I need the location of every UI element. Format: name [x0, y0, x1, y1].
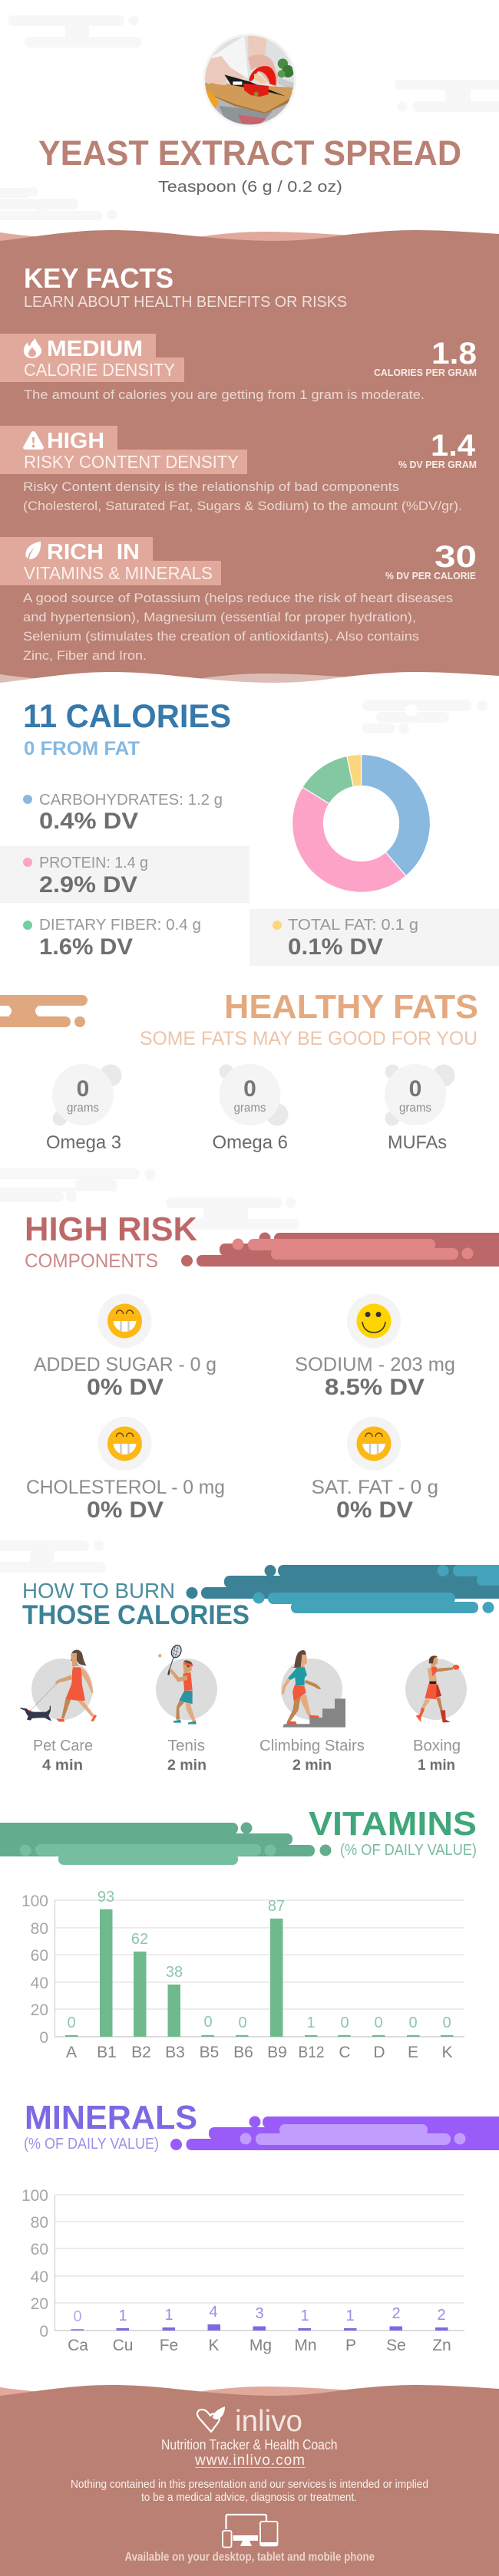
disclaimer: to be a medical advice, diagnosis or treatment.: [141, 2491, 357, 2504]
bar chart: minerals: 2: [392, 2305, 401, 2322]
icon: warning triangle: [23, 431, 44, 450]
item: cholesterol: [26, 1417, 225, 1523]
serving size: Teaspoon (6 g / 0.2 oz): [158, 179, 342, 196]
bar chart: minerals: Cu: [113, 2337, 133, 2354]
fact: rich in vitamins and minerals: VITAMINS & MINERALS: [24, 563, 213, 583]
logo: inlivo: [197, 2405, 302, 2438]
subheading: LEARN ABOUT HEALTH BENEFITS OR RISKS: [24, 294, 347, 311]
item: omega 6: Omega 6: [212, 1132, 288, 1153]
activity: climbing stairs: [259, 1650, 365, 1774]
fact: calorie density: CALORIE DENSITY: [24, 360, 175, 380]
bar chart: vitamins: 0: [238, 2014, 247, 2031]
heading: high risk: HIGH RISK: [25, 1211, 197, 1248]
icon: grinning face: [107, 1427, 142, 1461]
item: saturated fat: 0% DV: [336, 1497, 413, 1523]
activity: climbing stairs: 2 min: [292, 1757, 332, 1774]
item: mufas: grams: [399, 1102, 431, 1115]
heading: healthy fats: HEALTHY FATS: [224, 988, 478, 1026]
bar chart: vitamins: 20: [31, 2001, 48, 2019]
item: omega 3: Omega 3: [46, 1132, 121, 1153]
bar chart: minerals: 60: [31, 2241, 48, 2258]
fact: rich in vitamins and minerals: Zinc, Fiber and Iron.: [23, 648, 147, 663]
icon: grinning face: [356, 1427, 392, 1461]
legend: dietary fiber: 1.6% DV: [39, 934, 133, 960]
activity: pet care: Pet Care: [33, 1738, 93, 1754]
item: cholesterol: 0% DV: [87, 1497, 164, 1523]
item: omega 3: 0: [77, 1076, 89, 1102]
panel: healthy fats: [0, 988, 478, 1153]
legend: total fat: [250, 909, 499, 966]
header photo: cutting vegetables: [201, 34, 298, 131]
item: cholesterol: CHOLESTEROL - 0 mg: [26, 1477, 225, 1498]
bar chart: minerals: 20: [31, 2295, 48, 2313]
item: omega 3: [46, 1064, 121, 1153]
tagline: Nutrition Tracker & Health Coach: [161, 2437, 338, 2452]
bar chart: vitamins: 62: [131, 1931, 148, 1948]
icon: grinning face: [107, 1304, 142, 1338]
item: omega 3: grams: [67, 1102, 99, 1115]
bar chart: minerals: 0: [73, 2308, 82, 2325]
item: sodium: [295, 1294, 455, 1400]
legend: total fat: TOTAL FAT: 0.1 g: [288, 917, 418, 934]
panel: key facts: [0, 230, 499, 692]
decorative banner: orange: [0, 995, 88, 1027]
item: saturated fat: SAT. FAT - 0 g: [312, 1477, 438, 1498]
bar chart: vitamins: 0: [340, 2014, 349, 2031]
icon: flame: [24, 338, 41, 358]
bar chart: vitamins: B3: [165, 2044, 185, 2061]
bar chart: vitamins: 0: [67, 2014, 76, 2031]
item: sodium: 8.5% DV: [325, 1375, 425, 1400]
icon: boxer: [416, 1655, 459, 1722]
fact: risky content density: % DV PER GRAM: [398, 459, 477, 470]
donut chart: [292, 755, 430, 892]
icon: devices: [223, 2515, 278, 2547]
activity: tennis: 2 min: [167, 1757, 207, 1774]
bar chart: vitamins: B6: [233, 2044, 253, 2061]
heading: those calories: THOSE CALORIES: [22, 1600, 250, 1630]
activity: climbing stairs: Climbing Stairs: [259, 1738, 365, 1754]
bar chart: vitamins: 93: [97, 1889, 114, 1906]
heading: minerals: MINERALS: [25, 2099, 197, 2136]
activity: pet care: [20, 1650, 97, 1774]
bar chart: vitamins: 0: [408, 2014, 418, 2031]
decorative banner: green: [0, 1823, 332, 1865]
bar chart: minerals: 3: [255, 2305, 264, 2322]
bar chart: vitamins: 0: [39, 2029, 48, 2047]
bar chart: vitamins: 1: [306, 2014, 316, 2031]
fact: rich in vitamins and minerals: % DV PER CALORIE: [385, 570, 476, 581]
bar chart: vitamins: C: [339, 2044, 351, 2061]
bar chart: vitamins: 38: [166, 1964, 183, 1981]
activity: boxing: Boxing: [413, 1738, 461, 1754]
bar chart: minerals: 2: [437, 2307, 446, 2324]
bar chart: vitamins: 100: [21, 1892, 48, 1910]
activity: boxing: [405, 1655, 467, 1774]
title: YEAST EXTRACT SPREAD: [38, 133, 461, 173]
fact: calorie density: MEDIUM: [47, 337, 143, 361]
icon: woman walking a dog: [20, 1650, 97, 1721]
legend: dietary fiber: [23, 917, 201, 960]
bar chart: minerals: [21, 2187, 464, 2354]
panel: footer: [0, 2385, 499, 2576]
disclaimer: Nothing contained in this presentation and our services is intended or implied: [71, 2478, 428, 2491]
heading: key facts: KEY FACTS: [24, 262, 173, 294]
bar chart: minerals: Se: [386, 2337, 406, 2354]
bar chart: vitamins: 0: [374, 2014, 383, 2031]
fact: calorie density: CALORIES PER GRAM: [374, 367, 477, 378]
item: omega 6: 0: [243, 1076, 256, 1102]
activity: boxing: 1 min: [418, 1757, 455, 1774]
bar chart: vitamins: D: [373, 2044, 385, 2061]
item: saturated fat: [312, 1417, 438, 1523]
fact: rich in vitamins and minerals: and hypertension), Magnesium (essential for proper hydration),: [23, 610, 416, 624]
subheading: (% OF DAILY VALUE): [24, 2136, 159, 2153]
bar chart: minerals: 4: [209, 2304, 218, 2321]
legend: carbohydrates: 0.4% DV: [39, 809, 138, 834]
bar chart: minerals: P: [345, 2337, 356, 2354]
bar chart: minerals: 0: [39, 2323, 48, 2340]
bar chart: vitamins: 0: [442, 2014, 451, 2031]
panel: calories: [0, 698, 499, 966]
fact: rich in vitamins and minerals: A good source of Potassium (helps reduce the risk of heart diseases: [23, 591, 453, 605]
bar chart: vitamins: [21, 1889, 464, 2061]
bar chart: minerals: 1: [118, 2308, 127, 2324]
item: mufas: MUFAs: [388, 1132, 447, 1153]
fact: rich in vitamins and minerals: [0, 537, 477, 663]
bar chart: minerals: 1: [300, 2308, 309, 2324]
fact: calorie density: [0, 334, 477, 402]
icon: tennis player: [158, 1644, 197, 1724]
subheading: (% OF DAILY VALUE): [340, 1842, 477, 1859]
bar chart: vitamins: B12: [298, 2044, 324, 2061]
availability note: Available on your desktop, tablet and mobile phone: [124, 2551, 375, 2564]
legend: protein: 2.9% DV: [39, 872, 137, 898]
item: mufas: 0: [409, 1076, 421, 1102]
item: mufas: [385, 1064, 454, 1153]
icon: leaf: [25, 542, 41, 559]
bar chart: vitamins: B5: [200, 2044, 219, 2061]
panel: high risk components: [25, 1211, 499, 1523]
bar chart: minerals: 80: [31, 2214, 48, 2232]
item: added sugar: 0% DV: [87, 1375, 164, 1400]
bar chart: vitamins: B2: [131, 2044, 151, 2061]
bar chart: minerals: K: [208, 2337, 220, 2354]
legend: protein: [0, 846, 250, 903]
activity: pet care: 4 min: [42, 1757, 83, 1774]
item: omega 6: [212, 1064, 289, 1153]
panel: how to burn those calories: [20, 1565, 499, 1774]
decorative banner: red: [181, 1232, 499, 1267]
logo: inlivo: inlivo: [235, 2405, 302, 2438]
subheading: components: COMPONENTS: [25, 1250, 158, 1272]
website link: www.inlivo.com: [194, 2452, 305, 2469]
heading: vitamins: VITAMINS: [309, 1805, 477, 1843]
item: omega 6: grams: [233, 1102, 266, 1115]
bar chart: vitamins: 87: [268, 1898, 285, 1915]
bar chart: minerals: Mg: [250, 2337, 272, 2354]
fact: rich in vitamins and minerals: 30: [435, 540, 477, 574]
decorative banner: teal: [186, 1565, 499, 1613]
fact: rich in vitamins and minerals: Selenium (stimulates the creation of antioxidants). Also contains: [23, 629, 419, 644]
bar chart: vitamins: E: [408, 2044, 418, 2061]
bar chart: minerals: Fe: [160, 2337, 178, 2354]
fact: risky content density: 1.4: [431, 429, 476, 463]
bar chart: vitamins: B1: [97, 2044, 117, 2061]
fact: calorie density: The amount of calories you are getting from 1 gram is moderate.: [24, 387, 425, 402]
fact: calorie density: 1.8: [431, 337, 477, 371]
fact: risky content density: Risky Content density is the relationship of bad components: [23, 479, 399, 494]
activity: tennis: Tenis: [167, 1738, 205, 1754]
activity: tennis: [156, 1644, 217, 1774]
bar chart: vitamins: K: [441, 2044, 453, 2061]
bar chart: minerals: 40: [31, 2268, 48, 2286]
panel: vitamins: [0, 1805, 477, 2061]
icon: smiling face: [356, 1304, 392, 1338]
panel: minerals: [21, 2099, 499, 2354]
icon: woman climbing stairs: [282, 1650, 345, 1728]
legend: protein: PROTEIN: 1.4 g: [39, 855, 148, 871]
bar chart: vitamins: A: [66, 2044, 77, 2061]
bar chart: vitamins: 0: [203, 2014, 213, 2031]
bar chart: vitamins: 60: [31, 1947, 48, 1965]
fact: risky content density: HIGH: [47, 429, 104, 453]
disclaimer: [71, 2478, 428, 2504]
bar chart: minerals: 100: [21, 2187, 48, 2205]
legend: carbohydrates: CARBOHYDRATES: 1.2 g: [39, 792, 223, 809]
heading: how to burn: HOW TO BURN: [22, 1579, 175, 1603]
legend: total fat: 0.1% DV: [288, 934, 383, 960]
heading: calories: 11 CALORIES: [23, 698, 231, 735]
bar chart: vitamins: 80: [31, 1920, 48, 1938]
item: added sugar: [34, 1294, 216, 1400]
decorative banner: purple: [170, 2116, 499, 2150]
bar chart: vitamins: B9: [267, 2044, 287, 2061]
fact: rich in vitamins and minerals: RICH IN: [47, 540, 140, 565]
subheading: from fat: 0 FROM FAT: [24, 738, 140, 759]
bar chart: minerals: Ca: [68, 2337, 88, 2354]
legend: dietary fiber: DIETARY FIBER: 0.4 g: [39, 917, 201, 934]
background cloud shapes: [0, 15, 499, 1573]
item: sodium: SODIUM - 203 mg: [295, 1354, 455, 1375]
legend: carbohydrates: [23, 792, 223, 834]
item: added sugar: ADDED SUGAR - 0 g: [34, 1354, 216, 1375]
fact: risky content density: RISKY CONTENT DENSITY: [24, 452, 239, 472]
bar chart: minerals: Mn: [294, 2337, 317, 2354]
fact: risky content density: (Cholesterol, Saturated Fat, Sugars & Sodium) to the amount (%DV/gr).: [23, 499, 462, 513]
fact: risky content density: [0, 426, 477, 513]
bar chart: minerals: 1: [345, 2308, 355, 2324]
subheading: SOME FATS MAY BE GOOD FOR YOU: [140, 1028, 478, 1049]
bar chart: vitamins: 40: [31, 1975, 48, 1992]
bar chart: minerals: 1: [164, 2307, 173, 2324]
bar chart: minerals: Zn: [432, 2337, 451, 2354]
